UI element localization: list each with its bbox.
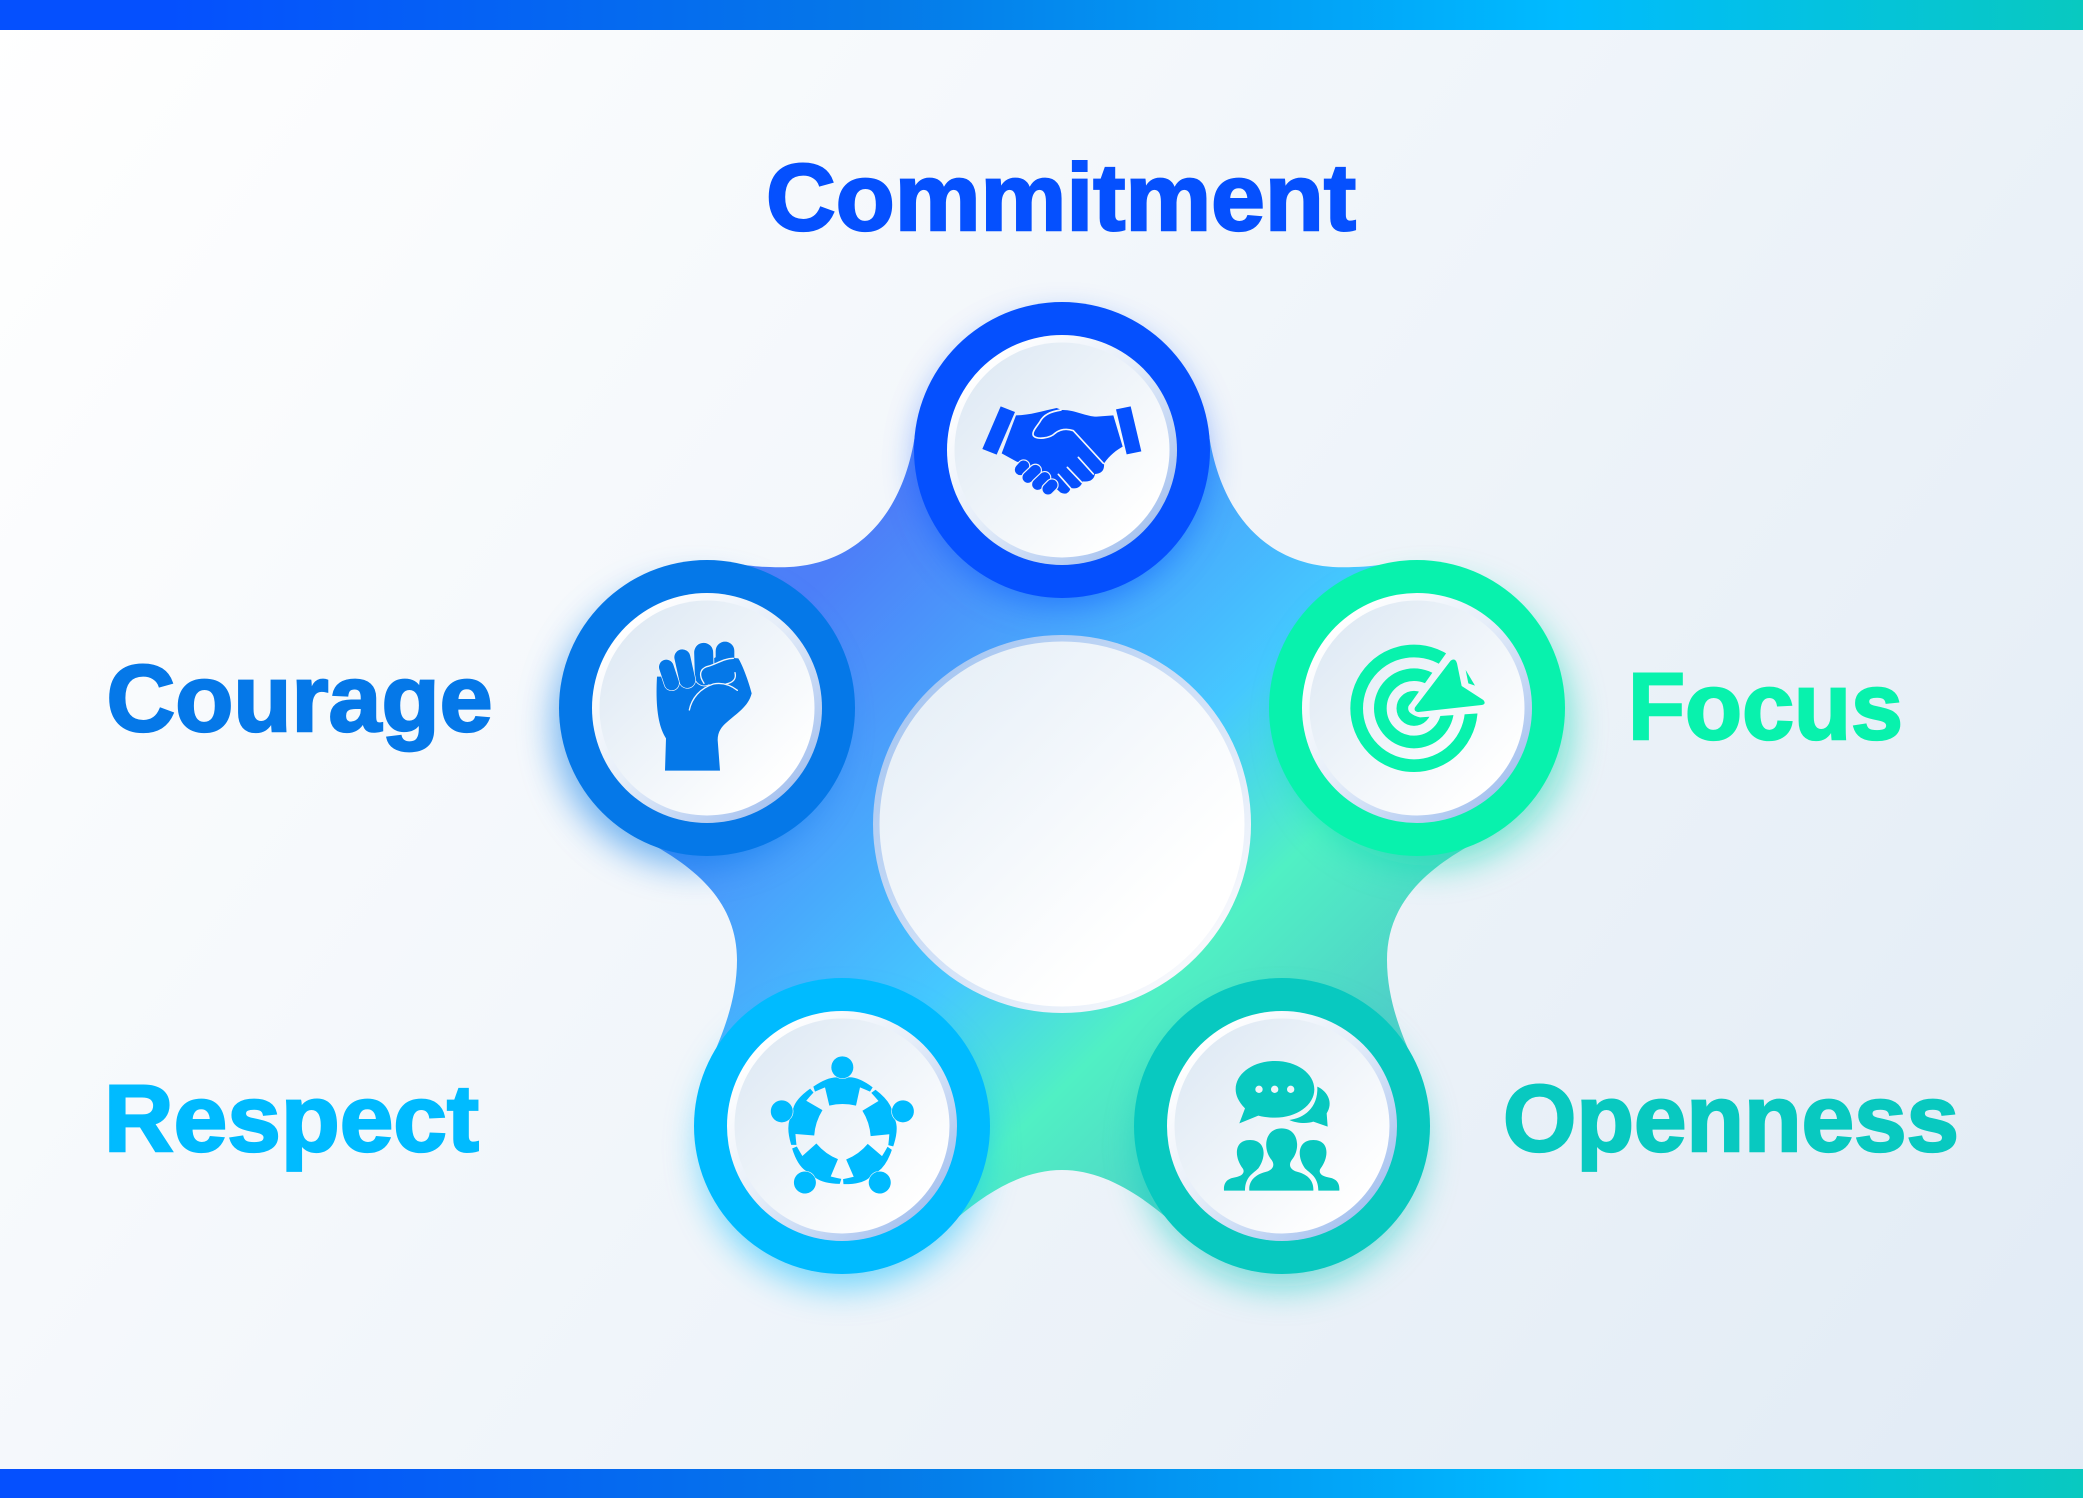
heading: Openness: Openness — [1503, 1066, 1959, 1172]
icon: target and arrow — [1357, 651, 1485, 766]
icon: people in a circle — [762, 1056, 923, 1209]
rim — [1302, 593, 1532, 823]
rim — [947, 335, 1177, 565]
rim — [592, 593, 822, 823]
face — [734, 1018, 950, 1234]
icon: handshake — [982, 406, 1141, 494]
center circle — [873, 635, 1251, 1013]
ring — [1269, 560, 1565, 856]
node: Openness — [1134, 978, 1430, 1274]
ring glows — [554, 321, 1570, 1287]
heading: Courage: Courage — [106, 646, 492, 752]
central blob shape — [640, 435, 1484, 1218]
node: Courage — [559, 560, 855, 856]
icon: raised fist — [657, 651, 752, 771]
ring — [914, 302, 1210, 598]
face — [954, 342, 1170, 558]
node: Focus — [1269, 560, 1565, 856]
face — [1174, 1018, 1390, 1234]
ring — [559, 560, 855, 856]
heading: Commitment: Commitment — [766, 145, 1356, 251]
ring — [694, 978, 990, 1274]
rim — [727, 1011, 957, 1241]
heading: Respect: Respect — [104, 1066, 479, 1172]
face — [600, 600, 814, 816]
top bar — [0, 0, 2083, 30]
bottom bar — [0, 1469, 2083, 1498]
face — [1310, 600, 1524, 816]
heading: Focus: Focus — [1628, 654, 1903, 760]
node: Commitment — [914, 302, 1210, 598]
rim — [1167, 1011, 1397, 1241]
node: Respect — [694, 978, 990, 1274]
icon: group conversation — [1224, 1061, 1339, 1191]
ring — [1134, 978, 1430, 1274]
